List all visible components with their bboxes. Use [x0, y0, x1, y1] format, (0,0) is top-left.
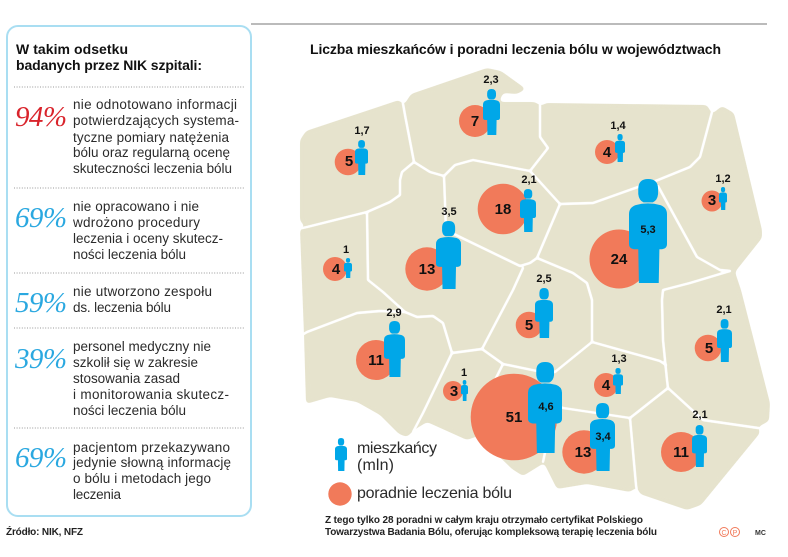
legend: residents: mieszkańcy [357, 440, 437, 457]
data: swietokrzyskie: 1,3 [611, 353, 627, 365]
data: opolskie: 3 [450, 383, 458, 400]
finding: 39%: stosowania zasad [73, 371, 180, 386]
data: slaskie [471, 362, 562, 460]
finding: 69% patients: jedynie słowną informację [72, 455, 231, 470]
finding: 39% [14, 339, 229, 418]
data: kujawsko-pomorskie: 18 [495, 201, 511, 218]
finding: 69% patients: pacjentom przekazywano [73, 440, 230, 455]
legend: residents: (mln) [357, 457, 394, 474]
data: zachodniopomorskie [335, 125, 370, 175]
data: dolnoslaskie: 11 [368, 352, 384, 369]
data: malopolskie: 3,4 [595, 431, 612, 443]
finding: 69% patients: 69% [15, 442, 67, 474]
data: slaskie: 4,6 [538, 401, 554, 413]
finding: 59%: 59% [15, 287, 67, 319]
finding: 69% procedures: ności leczenia bólu [73, 247, 186, 262]
data: kujawsko-pomorskie [478, 174, 537, 234]
data: slaskie: 51 [506, 409, 522, 426]
map silhouette [300, 68, 770, 510]
map of voivodeships [298, 68, 772, 510]
data: lubelskie: 2,1 [716, 304, 732, 316]
legend: residents [335, 438, 437, 474]
data: wielkopolskie [405, 206, 461, 291]
region borders [298, 98, 772, 500]
finding: 94%: skuteczności leczenia bólu [73, 161, 232, 176]
finding: 39%: szkolił się w zakresie [73, 355, 198, 370]
finding: 94%: nie odnotowano informacji [73, 97, 237, 112]
finding: 94%: potwierdzających systema- [73, 113, 239, 128]
map title: Liczba mieszkańców i poradni leczenia bólu w województwach [310, 41, 721, 57]
finding: 59%: ds. leczenia bólu [73, 300, 171, 315]
finding: 59%: nie utworzono zespołu [73, 284, 212, 299]
data: swietokrzyskie: 4 [602, 377, 611, 394]
finding: 94%: bólu oraz regularną ocenę [73, 145, 230, 160]
data: podkarpackie [661, 409, 708, 472]
data: lubuskie [323, 244, 352, 281]
finding: 69% procedures: wdrożono procedury [72, 215, 200, 230]
data: malopolskie: 13 [575, 444, 591, 461]
data: dolnoslaskie [356, 307, 405, 380]
footnote [325, 515, 657, 538]
data: podlaskie: 1,2 [715, 173, 731, 185]
data: lodzkie [516, 273, 553, 338]
copyright marks: C [721, 530, 727, 537]
finding: 69% procedures: 69% [15, 202, 67, 234]
author initials: MC [755, 530, 766, 537]
finding: 69% patients: leczenia [73, 487, 121, 502]
data: swietokrzyskie [594, 353, 627, 397]
data: opolskie [443, 367, 468, 401]
data: pomorskie [459, 74, 500, 137]
footnote: Z tego tylko 28 poradni w całym kraju otrzymało certyfikat Polskiego [325, 515, 643, 526]
data: kujawsko-pomorskie: 2,1 [521, 174, 537, 186]
panel: NIK survey findings [7, 26, 251, 516]
finding: 39%: personel medyczny nie [73, 339, 211, 354]
finding: 39%: i monitorowania skutecz- [73, 387, 229, 402]
data: malopolskie [562, 403, 615, 474]
source note: Źródło: NIK, NFZ [6, 525, 83, 538]
data: opolskie: 1 [461, 367, 467, 379]
data: podkarpackie: 2,1 [692, 409, 708, 421]
finding: 69% patients [15, 440, 231, 502]
data: mazowieckie: 5,3 [640, 224, 656, 236]
data: zachodniopomorskie: 5 [345, 153, 353, 170]
data: warminsko-mazurskie [595, 120, 627, 164]
data: warminsko-mazurskie: 1,4 [610, 120, 627, 132]
data: mazowieckie: 24 [611, 251, 628, 268]
finding: 94% [15, 97, 239, 176]
data: lubelskie [695, 304, 732, 362]
data: wielkopolskie: 3,5 [441, 206, 457, 218]
data: warminsko-mazurskie: 4 [603, 144, 612, 161]
footnote: Towarzystwa Badania Bólu, oferując kompleksową terapię leczenia bólu [325, 527, 657, 538]
panel heading [16, 41, 202, 73]
data: pomorskie: 2,3 [483, 74, 499, 86]
data: podlaskie [702, 173, 731, 212]
finding: 69% procedures [15, 199, 223, 262]
data: wielkopolskie: 13 [419, 261, 435, 278]
data: lodzkie: 2,5 [536, 273, 552, 285]
finding: 69% procedures: leczenia i oceny skutecz- [73, 231, 223, 246]
copyright marks: P [733, 530, 738, 537]
data: mazowieckie [590, 179, 667, 288]
finding: 94%: 94% [15, 101, 67, 133]
finding: 59% [15, 284, 212, 319]
data: pomorskie: 7 [471, 113, 479, 130]
data: lubuskie: 1 [343, 244, 349, 256]
data: zachodniopomorskie: 1,7 [354, 125, 370, 137]
legend [328, 438, 512, 506]
data: podlaskie: 3 [708, 192, 716, 209]
legend: clinics [328, 482, 512, 506]
panel heading: badanych przez NIK szpitali: [16, 57, 202, 73]
finding: 69% patients: o bólu i metodach jego [73, 471, 211, 486]
finding: 69% procedures: nie opracowano i nie [73, 199, 199, 214]
legend: clinics: poradnie leczenia bólu [357, 485, 512, 502]
panel heading: W takim odsetku [16, 41, 128, 57]
data: lubelskie: 5 [705, 340, 713, 357]
finding: 39%: 39% [14, 343, 67, 375]
finding: 94%: tyczne pomiary natężenia [73, 130, 229, 145]
data: lodzkie: 5 [525, 317, 533, 334]
data: dolnoslaskie: 2,9 [386, 307, 402, 319]
data: lubuskie: 4 [332, 261, 341, 278]
data: podkarpackie: 11 [673, 444, 689, 461]
finding: 39%: ności leczenia bólu [73, 403, 186, 418]
copyright marks [720, 528, 740, 537]
